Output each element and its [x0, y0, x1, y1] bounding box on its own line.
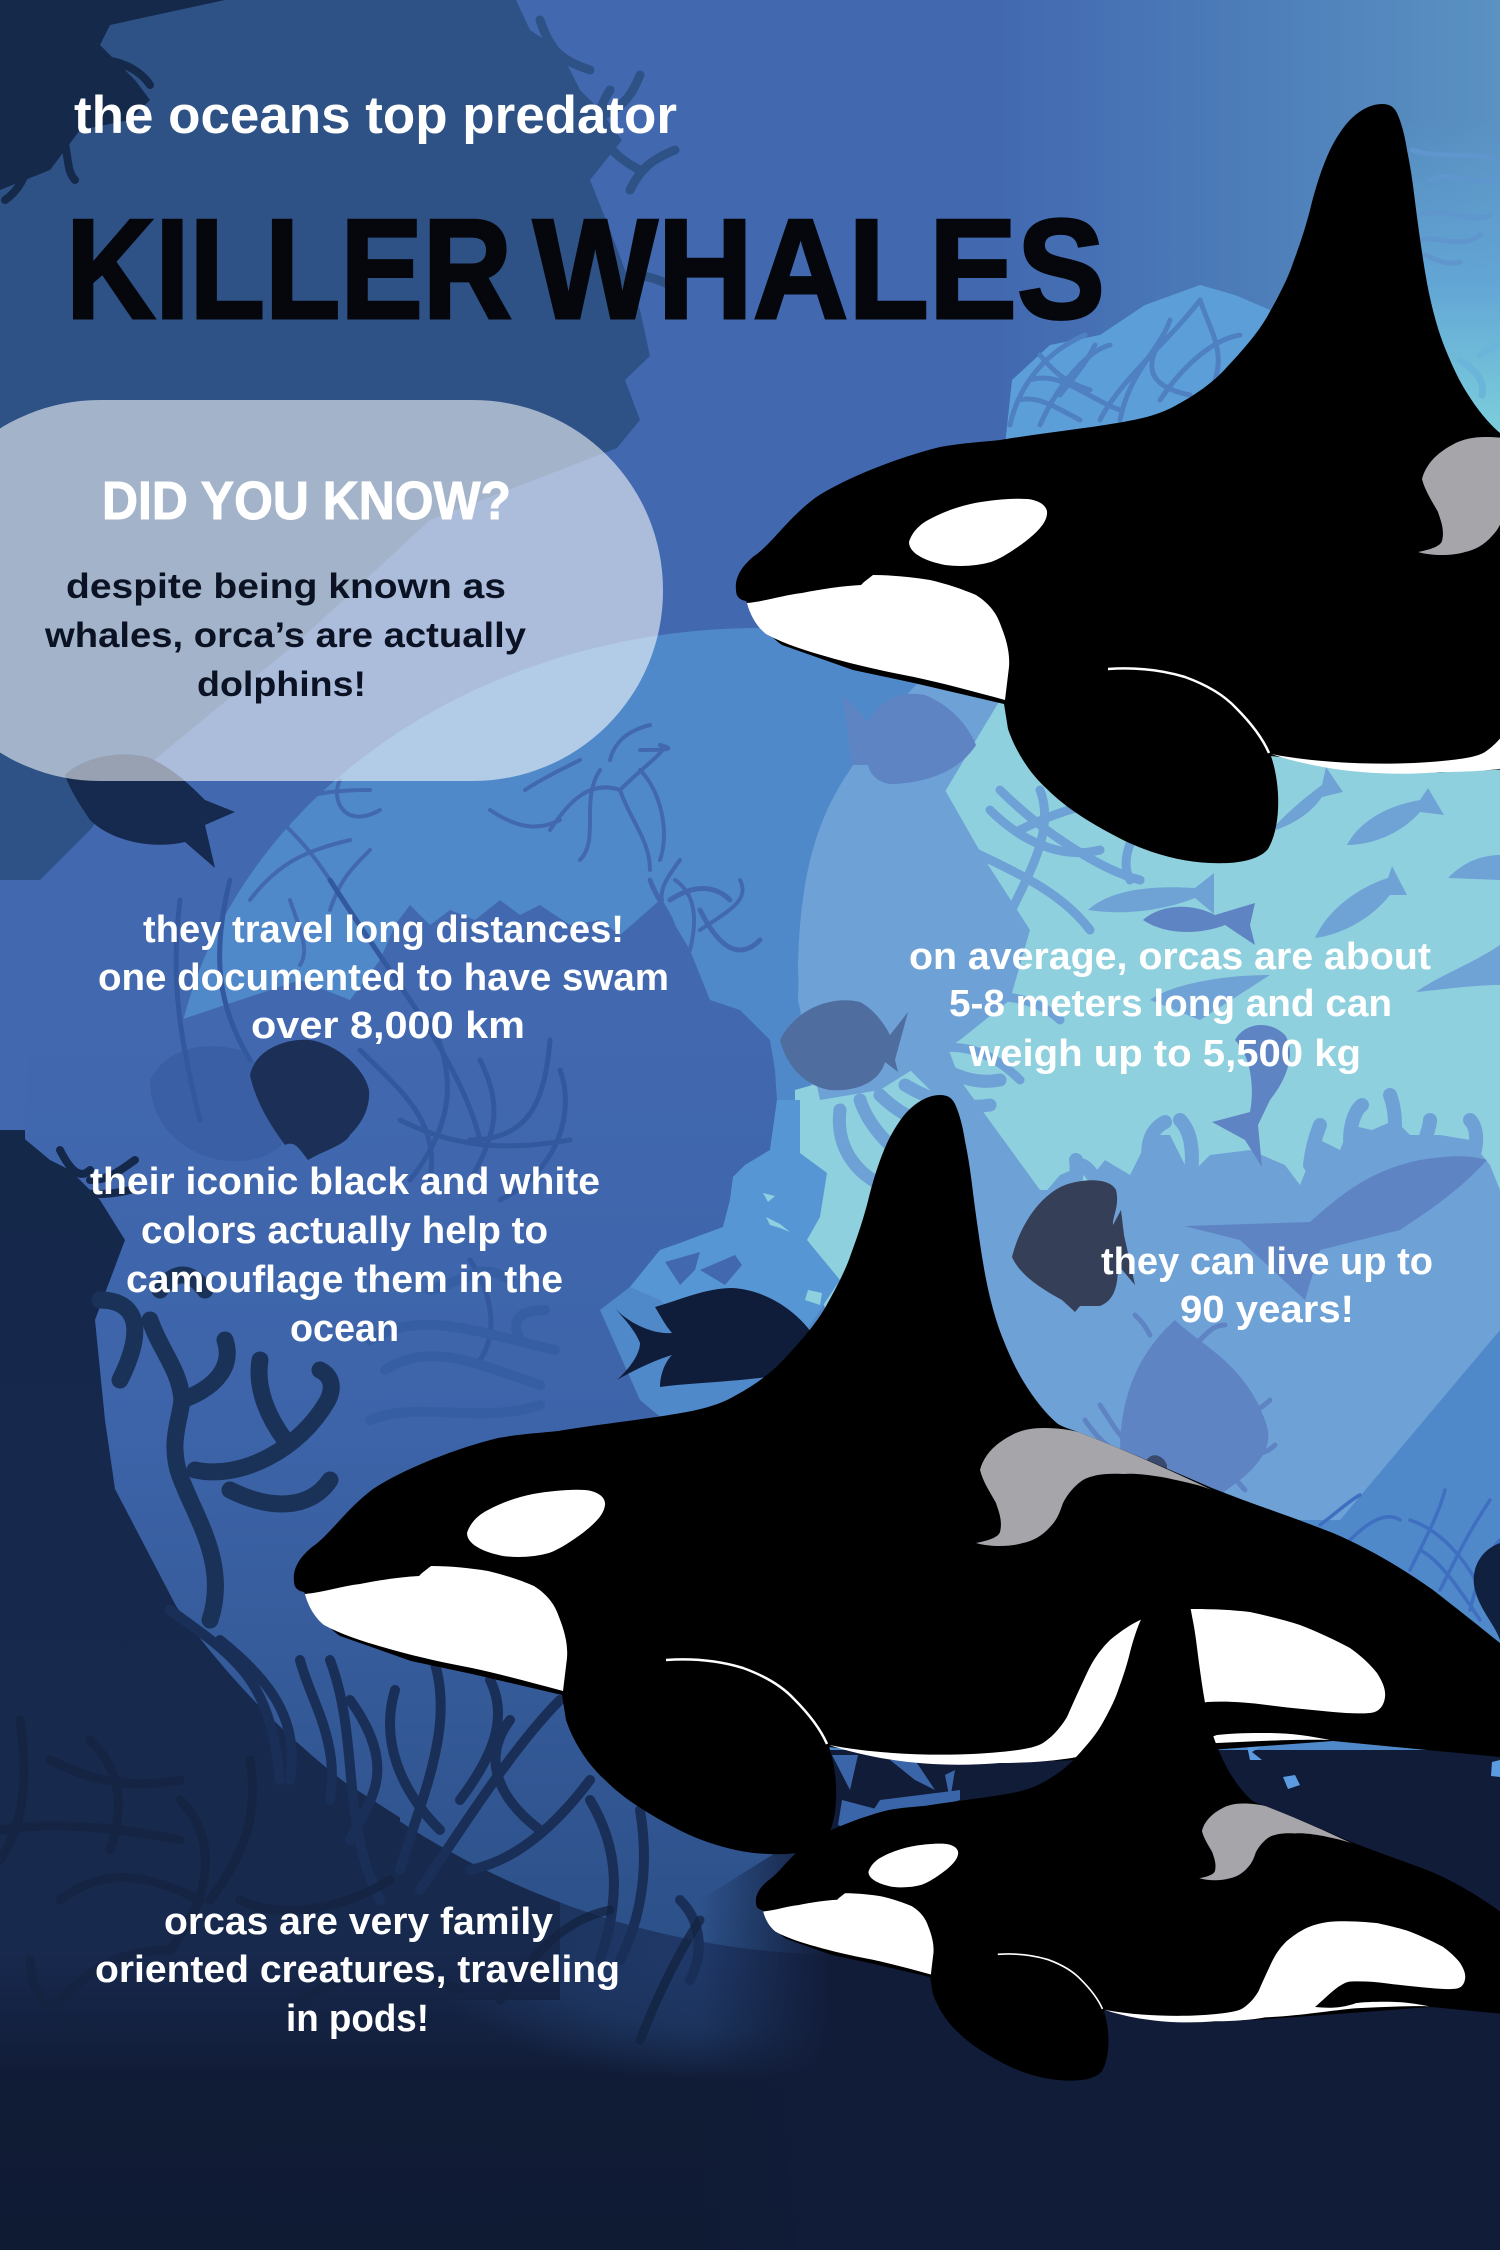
coral: far-right tips by the back of the big whale — [1320, 1490, 1500, 1620]
fact: size and weight — [909, 936, 1431, 1075]
fact: size and weight: on average, orcas are about — [909, 936, 1431, 978]
fact: family pods: in pods! — [286, 1998, 429, 2040]
callout text: despite being known as — [66, 567, 506, 606]
callout: did you know pill — [0, 400, 663, 781]
fact: long distances: one documented to have swam — [98, 957, 669, 999]
fact: family pods: oriented creatures, traveling — [95, 1949, 620, 1991]
coral: thin fans under the callout — [230, 725, 743, 1000]
fact: lifespan: 90 years! — [1180, 1289, 1354, 1331]
fish: small dark fin behind the saddle — [1145, 1455, 1167, 1472]
callout text: dolphins! — [197, 665, 366, 704]
coral: central blue mass — [25, 900, 777, 1782]
fact: family pods — [95, 1901, 620, 2040]
coral: dark top-left mass — [0, 0, 680, 880]
coral: mid-blue band of the big circle under the whale — [400, 1747, 830, 1902]
fact: camouflage colours: their iconic black and white — [90, 1161, 600, 1203]
fact: camouflage colours — [90, 1161, 600, 1350]
fish: school of small fish — [1088, 767, 1500, 1020]
fact: camouflage colours: ocean — [290, 1308, 399, 1350]
fish: darker blue small fish — [1143, 903, 1487, 1300]
coral: tree branches left — [100, 1275, 331, 1620]
fact: long distances — [98, 909, 669, 1047]
fact: camouflage colours: colors actually help to — [141, 1210, 548, 1252]
coral: left navy mass — [0, 1135, 560, 2000]
coral: light mass at left of the teal water — [798, 740, 1500, 1520]
fish: dark, left — [250, 1040, 369, 1160]
whale: top orca — [736, 104, 1500, 863]
coral: thin trees behind the left text — [176, 880, 570, 1360]
coral: navy top-left corner — [0, 0, 225, 200]
title: KILLER — [66, 190, 512, 349]
coral: blue fan above the first whale — [1005, 285, 1280, 445]
coral: teal swirls right of the fin — [1460, 345, 1500, 395]
coral: faint fans right of the fin — [1412, 150, 1495, 263]
fish: dark slate — [1012, 1180, 1135, 1312]
fact: long distances: they travel long distances! — [143, 909, 624, 951]
fact: size and weight: weigh up to 5,500 kg — [968, 1033, 1361, 1075]
fish: blue silhouette by the first whale — [843, 694, 976, 784]
title — [66, 190, 1105, 349]
whale: large orca — [294, 1095, 1500, 1854]
whale: calf orca — [756, 1587, 1500, 2081]
coral: branches in the teal water — [930, 790, 1150, 1080]
fish: under the callout — [65, 754, 235, 868]
coral: teal-side fan beside the fish — [650, 880, 760, 960]
callout heading: DID YOU KNOW? — [102, 471, 511, 531]
fish: grey-blue near centre — [780, 1000, 908, 1090]
fact: lifespan: they can live up to — [1101, 1241, 1433, 1283]
coral: wide fronds above the dorsal fin — [839, 1060, 1000, 1190]
coral: thin dark branches under the big whale — [170, 1610, 699, 1980]
coral: fronds right of the ocean text — [370, 1271, 555, 1420]
title: WHALES — [533, 190, 1105, 349]
coral: low branches on the sea floor — [0, 1720, 700, 2040]
coral: blue tuft above the back of the big whale — [1085, 1315, 1275, 1500]
fact: long distances: over 8,000 km — [251, 1005, 525, 1047]
sea floor: navy ground under the big whale — [700, 1746, 1500, 2250]
callout text: whales, orca’s are actually — [44, 616, 527, 655]
fact: lifespan — [1101, 1241, 1433, 1331]
fact: camouflage colours: camouflage them in the — [126, 1259, 563, 1301]
fish: navy behind the dorsal fin — [615, 1288, 811, 1387]
coral: darker tuft left of the fish — [150, 1046, 290, 1161]
subtitle: the oceans top predator — [74, 86, 677, 145]
coral: fronds along the teal water floor — [995, 1095, 1476, 1290]
fact: size and weight: 5-8 meters long and can — [949, 983, 1392, 1025]
fact: family pods: orcas are very family — [164, 1901, 553, 1943]
callout text — [44, 567, 527, 704]
fish: dark tail at the right edge — [1474, 1543, 1500, 1640]
coral: lighter tufts beside the dorsal fin — [630, 1100, 840, 1340]
